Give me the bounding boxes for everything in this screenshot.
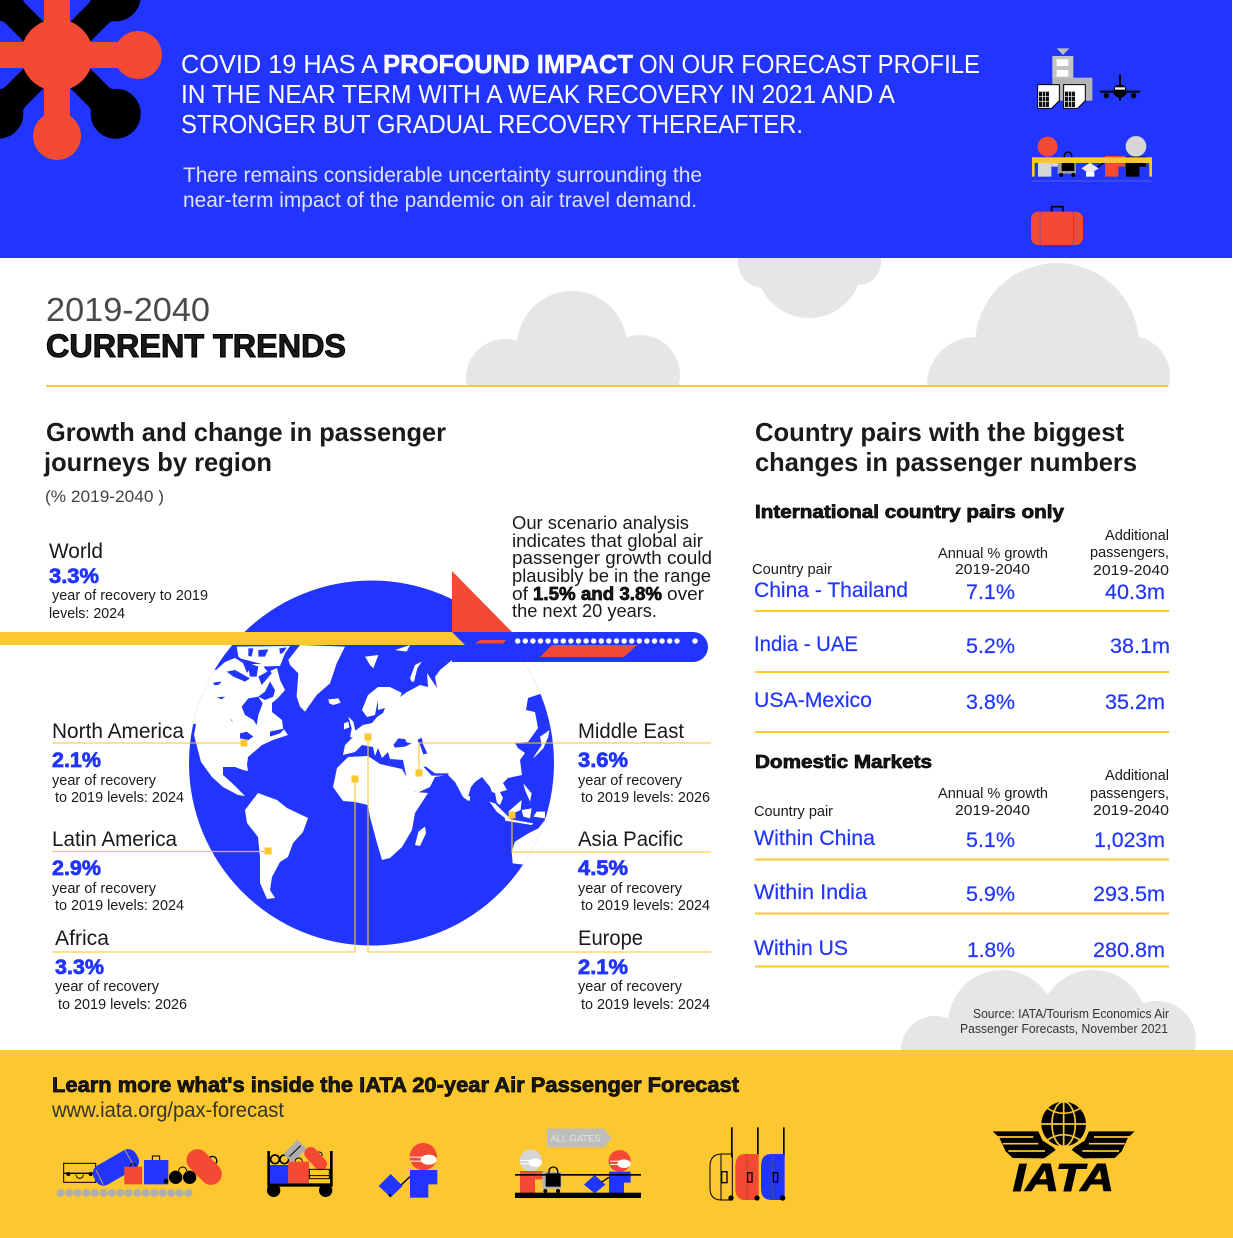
cloud behind source	[901, 970, 1196, 1084]
row: Within India: 293.5m	[1093, 883, 1165, 906]
region stat: Latin America: 2.9%	[52, 857, 101, 880]
region stat: Asia Pacific: year of recovery	[578, 880, 682, 897]
region stat: World: levels: 2024	[49, 605, 125, 622]
headline: ON OUR FORECAST PROFILE	[639, 49, 980, 79]
row: USA-Mexico: 35.2m	[1105, 691, 1165, 714]
region stat: Africa: Africa	[55, 927, 109, 950]
section title	[46, 291, 1168, 387]
region stat: North America	[52, 720, 184, 806]
callout: scenario analysis: Our scenario analysis	[512, 513, 689, 533]
icon: red suitcase	[1031, 207, 1083, 245]
callout: scenario analysis	[512, 513, 712, 621]
region stat: Europe: year of recovery	[578, 978, 682, 995]
region stat: World: 3.3%	[49, 565, 99, 588]
row: USA-Mexico: 3.8%	[966, 691, 1015, 714]
logo: IATA: IATA	[1013, 1156, 1114, 1200]
table: international country pairs	[752, 502, 1170, 733]
icon: three suitcases	[710, 1127, 785, 1201]
icon: virus	[0, 0, 162, 160]
subheading: There remains considerable uncertainty surrounding the	[183, 163, 702, 187]
heading: country pairs: changes in passenger numbers	[755, 447, 1137, 477]
headline	[181, 49, 980, 139]
region stat: Latin America: year of recovery	[52, 880, 156, 897]
icon: luggage cart	[267, 1140, 333, 1197]
column headers: passengers,	[1090, 544, 1169, 561]
row: Within India: Within India	[754, 881, 867, 904]
heading: country pairs: Country pairs with the biggest	[755, 417, 1124, 447]
land masses	[193, 658, 540, 899]
region stat: Africa: 3.3%	[55, 956, 104, 979]
subheading: percent range: (% 2019-2040 )	[45, 487, 164, 506]
region stat: Middle East	[578, 720, 710, 806]
region stat: Middle East: 3.6%	[578, 749, 628, 772]
row: USA-Mexico	[754, 689, 1169, 733]
heading: country pairs	[755, 417, 1137, 477]
headline: STRONGER BUT GRADUAL RECOVERY THEREAFTER.	[181, 109, 803, 139]
region stat: North America: year of recovery	[52, 772, 156, 789]
region stat: Latin America	[52, 828, 184, 914]
panel: footer	[0, 1050, 1233, 1238]
region stat: Middle East: Middle East	[578, 720, 684, 743]
table: domestic markets	[754, 752, 1169, 968]
table: international country pairs: International country pairs only	[755, 502, 1064, 522]
headline: PROFOUND IMPACT	[383, 49, 633, 79]
region stat: Europe: 2.1%	[578, 956, 628, 979]
region stat: Middle East: to 2019 levels: 2026	[581, 789, 710, 806]
region stat: Europe: to 2019 levels: 2024	[581, 996, 710, 1013]
row: India - UAE: 38.1m	[1110, 635, 1170, 658]
icon: masked traveller	[379, 1143, 437, 1198]
column headers	[752, 527, 1169, 579]
world map globe	[189, 580, 554, 946]
region stat: Africa: year of recovery	[55, 978, 159, 995]
row: Within China	[754, 827, 1169, 860]
region stat: North America: North America	[52, 720, 184, 743]
column headers	[754, 767, 1169, 820]
callout: scenario analysis: of	[512, 584, 529, 604]
headline: IN THE NEAR TERM WITH A WEAK RECOVERY IN 2021 AND A	[181, 79, 896, 109]
heading: growth by region: journeys by region	[43, 447, 272, 477]
region stat: World	[49, 540, 208, 622]
column headers: Additional	[1105, 527, 1169, 544]
Eurasia details	[365, 645, 549, 776]
row: Within US: 1.8%	[967, 939, 1015, 962]
subheading: near-term impact of the pandemic on air travel demand.	[183, 188, 697, 212]
column headers: Additional	[1105, 767, 1169, 784]
row: Within US: 280.8m	[1093, 939, 1165, 962]
icon: gate counter with sign	[515, 1129, 641, 1198]
column headers: Annual % growth	[938, 785, 1048, 802]
column headers: Country pair	[754, 803, 833, 820]
row: Within India	[754, 881, 1169, 914]
column headers: 2019-2040	[1093, 562, 1169, 579]
row: India - UAE: India - UAE	[754, 633, 858, 656]
row: India - UAE	[754, 633, 1170, 673]
section title: 2019-2040	[46, 291, 210, 328]
callout: scenario analysis: over	[667, 584, 704, 604]
region stat: North America: 2.1%	[52, 749, 101, 772]
region stat: North America: to 2019 levels: 2024	[55, 789, 184, 806]
panel: header banner	[0, 0, 1232, 258]
row: Within US	[754, 937, 1169, 968]
subheading	[183, 163, 702, 212]
region stat: Middle East: year of recovery	[578, 772, 682, 789]
region stat: Europe: Europe	[578, 927, 643, 950]
region stat: Asia Pacific	[578, 828, 710, 914]
icon: baggage carousel	[57, 1146, 217, 1197]
region stat: Africa: to 2019 levels: 2026	[58, 996, 187, 1013]
callout: scenario analysis: indicates that global air	[512, 531, 703, 551]
source note: Passenger Forecasts, November 2021	[960, 1021, 1168, 1036]
region stat: Asia Pacific: Asia Pacific	[578, 828, 683, 851]
icon: airport terminal and plane	[1038, 48, 1140, 108]
row: Within China: 5.1%	[966, 829, 1015, 852]
icon: gate counter with sign: ALL GATES	[550, 1134, 601, 1144]
callout: scenario analysis: the next 20 years.	[512, 601, 657, 621]
callout: scenario analysis: plausibly be in the range	[512, 566, 711, 586]
source note	[960, 1006, 1170, 1036]
column headers: Country pair	[752, 561, 832, 578]
column headers: Annual % growth	[938, 545, 1048, 562]
footer link: www.iata.org/pax-forecast	[51, 1099, 284, 1122]
headline: COVID 19 HAS A	[181, 49, 379, 79]
map connector lines and markers	[52, 734, 711, 952]
row: Within US: Within US	[754, 937, 848, 960]
region stat: World: year of recovery to 2019	[52, 587, 208, 604]
region stat: Europe	[578, 927, 710, 1013]
region stat: Asia Pacific: 4.5%	[578, 857, 628, 880]
North America and Atlantic details	[213, 645, 357, 740]
column headers: 2019-2040	[955, 802, 1030, 819]
region stat: Africa	[55, 927, 187, 1013]
column headers: 2019-2040	[955, 561, 1030, 578]
logo: IATA	[993, 1102, 1135, 1200]
Indian Ocean and Oceania details	[415, 783, 557, 865]
footer heading: Learn more what's inside the IATA 20-year Air Passenger Forecast	[52, 1074, 739, 1097]
row: China - Thailand: 40.3m	[1105, 581, 1165, 604]
row: China - Thailand	[754, 579, 1169, 612]
row: China - Thailand: 7.1%	[966, 581, 1015, 604]
section title: CURRENT TRENDS	[46, 328, 346, 364]
icon: check-in counter	[1032, 136, 1153, 181]
row: Within India: 5.9%	[966, 883, 1015, 906]
region stat: World: World	[49, 540, 103, 563]
row: USA-Mexico: USA-Mexico	[754, 689, 872, 712]
column headers: passengers,	[1090, 785, 1169, 802]
source note: Source: IATA/Tourism Economics Air	[973, 1006, 1170, 1021]
clouds behind section title	[466, 258, 1170, 386]
region stat: Latin America: Latin America	[52, 828, 177, 851]
callout: scenario analysis: passenger growth could	[512, 548, 712, 568]
row: India - UAE: 5.2%	[966, 635, 1015, 658]
callout: scenario analysis: 1.5% and 3.8%	[533, 584, 662, 604]
heading: growth by region: Growth and change in passenger	[46, 417, 446, 447]
row: China - Thailand: China - Thailand	[754, 579, 908, 602]
table: domestic markets: Domestic Markets	[755, 752, 932, 772]
row: Within China: 1,023m	[1094, 829, 1165, 852]
row: Within China: Within China	[754, 827, 875, 850]
region stat: Latin America: to 2019 levels: 2024	[55, 897, 184, 914]
plane fuselage	[0, 571, 708, 662]
column headers: 2019-2040	[1093, 802, 1169, 819]
heading: growth by region	[43, 417, 446, 477]
region stat: Asia Pacific: to 2019 levels: 2024	[581, 897, 710, 914]
